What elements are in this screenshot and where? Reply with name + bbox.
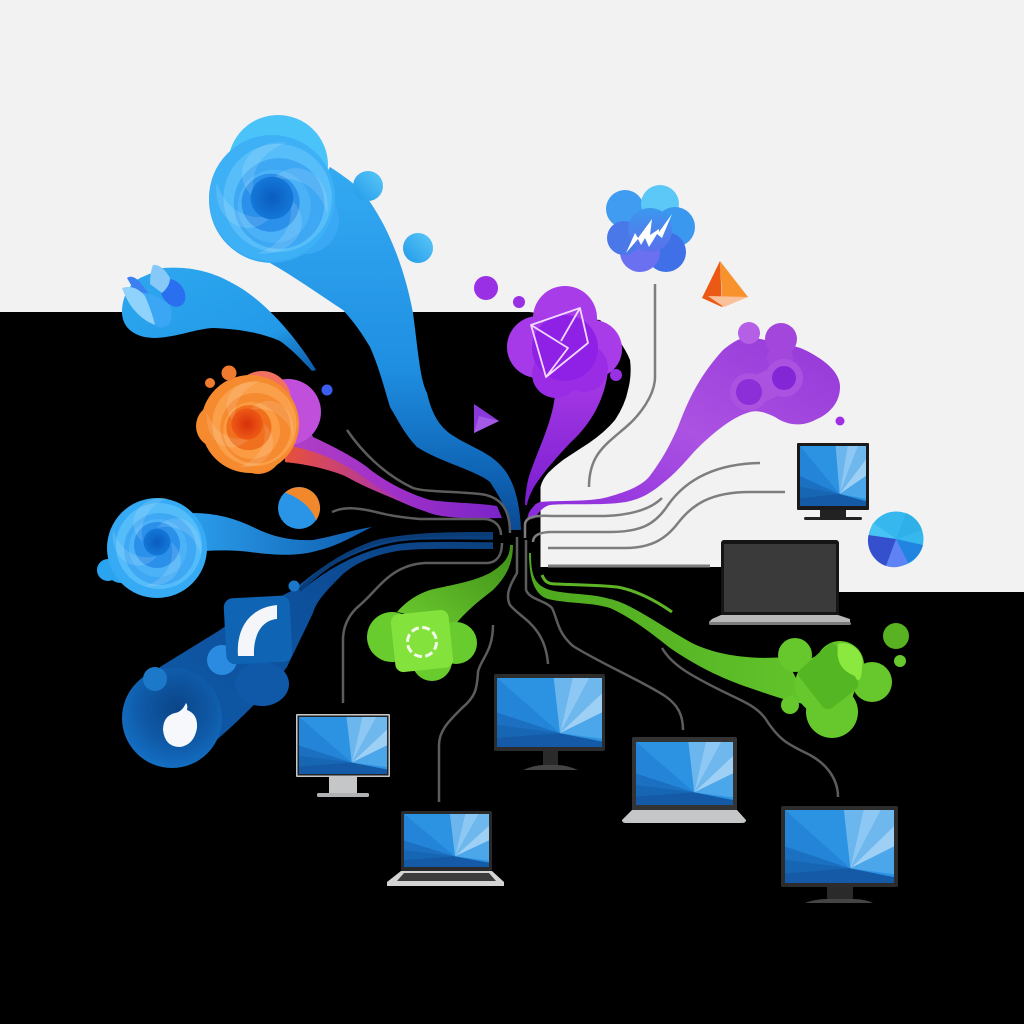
leaf petals [122,265,191,328]
icon: envelope outline [531,308,588,377]
dot [610,369,622,381]
swirl head [97,498,207,598]
dot [513,296,525,308]
rotated square [798,643,858,709]
highlight [837,643,863,680]
blob [143,667,167,691]
flow: purple right blob with tail [527,322,844,520]
connector lines: dark side [332,430,838,802]
tail [150,534,493,763]
flow: left green blob with tail [367,545,513,681]
icon: dashed circle [408,628,436,656]
flow: orange swirl with purple tail [196,366,502,518]
tail [193,513,372,555]
red under tail [285,445,415,506]
tail [529,553,810,705]
tail and blob [527,337,840,520]
dot [353,171,383,201]
icon: lightning cloud [606,185,695,272]
flow: large blue swirl with tail [209,115,521,530]
blob [207,645,237,675]
dot [403,233,433,263]
flow: purple envelope blob with tail [474,276,622,505]
flow: blue leaf with tail [122,265,316,371]
device: top right monitor [797,443,869,520]
molecule blobs [730,322,803,411]
dot [894,655,906,667]
dot [474,276,498,300]
blob [367,612,477,681]
tail [270,167,521,530]
dot [222,366,236,380]
device: left monitor [296,714,390,797]
device: dark laptop [709,540,851,625]
device: center monitor [494,674,605,770]
icon: orange pyramid [702,261,748,307]
flow: navy tail with app icons [122,534,493,768]
icon: white arc [238,605,277,656]
ball [122,668,222,768]
connector lines: light side [525,284,785,566]
icon: pie ball [868,512,924,567]
device: lower right monitor [781,806,898,903]
thin strand [542,575,672,612]
flow: left blue swirl with tail [97,498,372,598]
orange swirl head [196,371,299,474]
dot [288,580,300,592]
dot [836,416,844,426]
icon: orange and blue ball [278,487,320,529]
tail [397,545,513,625]
icon: purple pyramid [474,404,499,433]
blob [235,662,289,706]
tail [285,400,502,518]
purple blob [255,379,321,445]
dot [322,384,332,396]
background: black area [0,312,1024,1024]
tail [122,268,316,371]
dot [883,623,909,649]
rounded square [223,595,293,665]
icon: white apple [163,703,197,747]
blobs [778,638,892,738]
device: lower left laptop [387,811,504,886]
device: center right laptop [622,737,746,823]
dark strand gap [300,541,493,590]
tail [525,370,608,505]
blob [507,286,622,398]
dot [205,378,215,388]
flow: right green blob with tail [529,553,909,738]
rounded square [390,609,454,673]
swirl head [209,115,339,263]
